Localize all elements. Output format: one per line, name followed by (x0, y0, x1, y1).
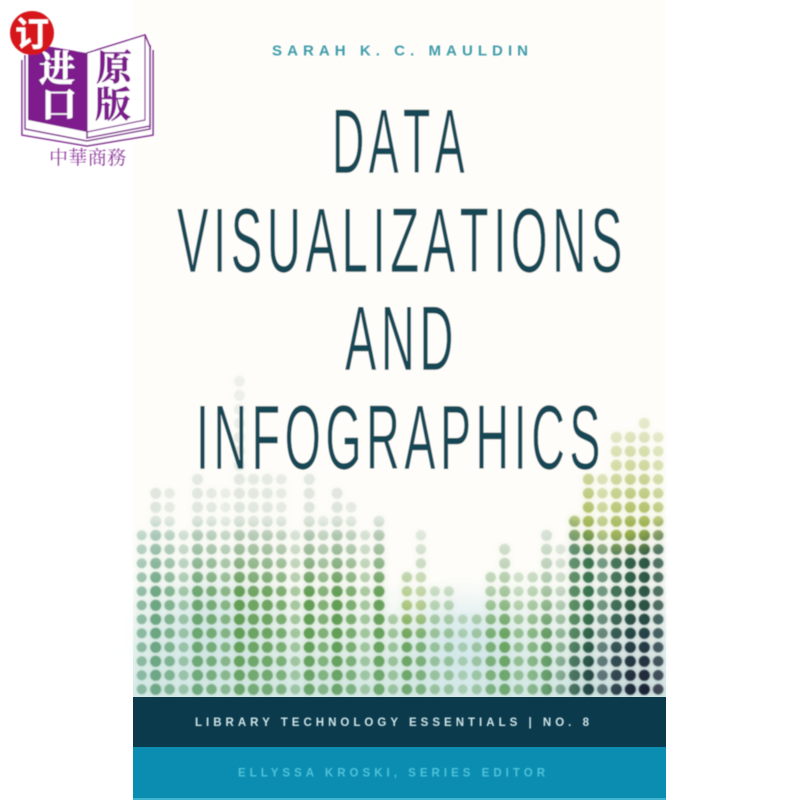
book characters (39, 40, 134, 128)
soft blue glow behind dots (133, 580, 666, 697)
book characters: 口 (41, 77, 77, 128)
book cover panel (130, 0, 670, 800)
icon: red order badge: 订 (15, 7, 49, 56)
series label: LIBRARY TECHNOLOGY ESSENTIALS | NO. 8 (195, 717, 590, 729)
dot matrix equalizer chart (130, 370, 670, 700)
book characters: 进 (39, 41, 75, 92)
series editor label: ELLYSSA KROSKI, SERIES EDITOR (238, 768, 546, 780)
author name: SARAH K. C. MAULDIN (272, 42, 528, 60)
icon: open book (22, 35, 153, 146)
book characters: 版 (95, 77, 131, 128)
title: AND (345, 288, 458, 390)
cover paper (133, 0, 666, 800)
editor band (133, 747, 666, 800)
series band (133, 697, 666, 747)
title: DATA (332, 91, 469, 193)
publisher badge logo (10, 7, 153, 170)
publisher name: 中華商務 (49, 143, 126, 170)
title (177, 91, 627, 489)
book characters: 原 (96, 40, 134, 91)
